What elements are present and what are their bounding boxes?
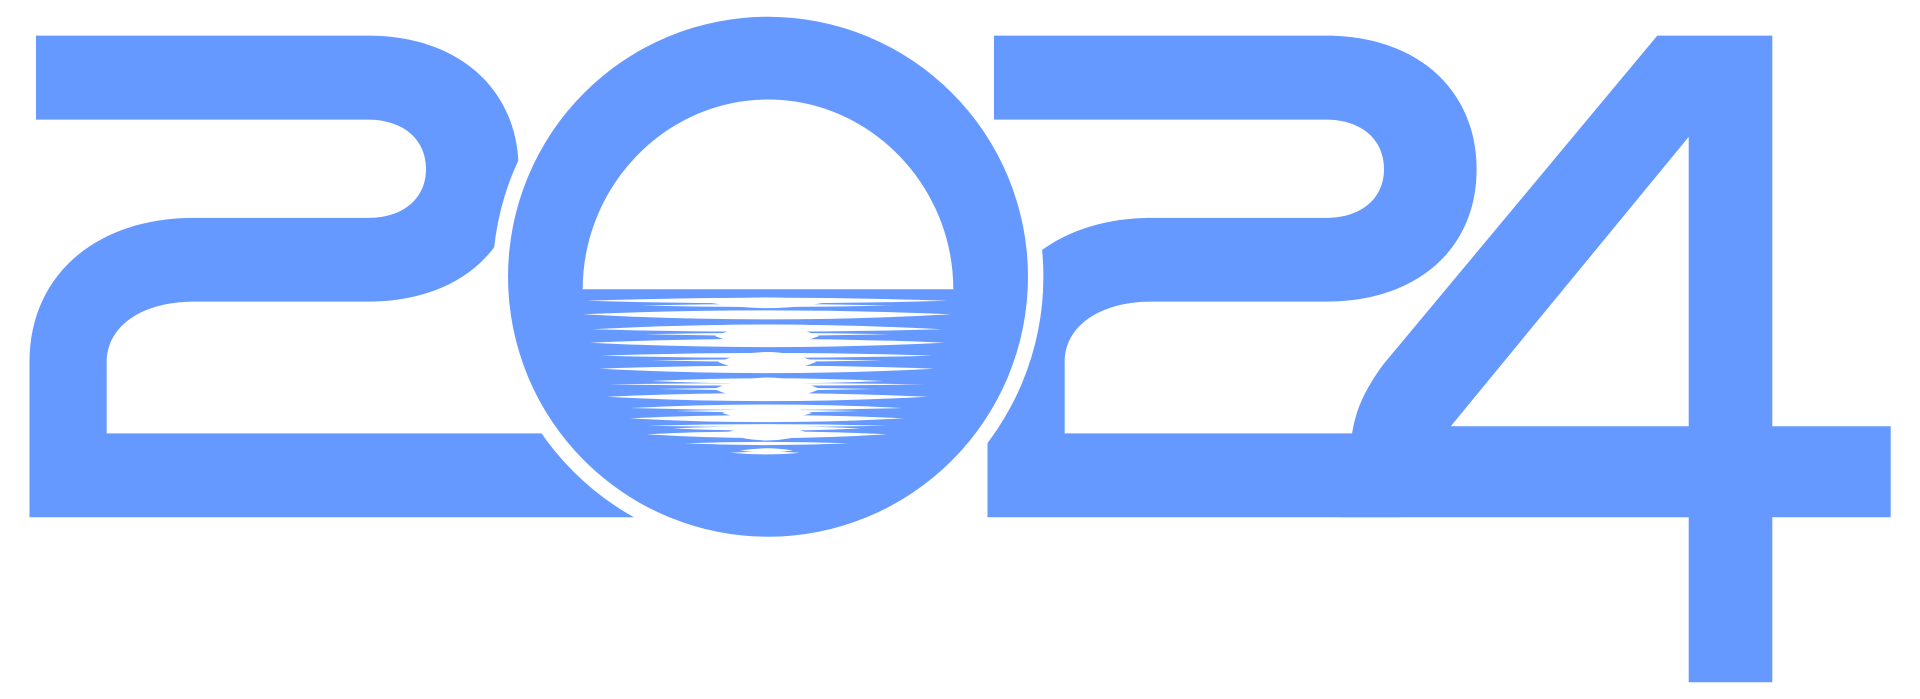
- sun circle: [508, 17, 1028, 537]
- digit: first 2: [30, 36, 780, 517]
- digit: second 2 and 4: [988, 36, 1891, 682]
- digit: second 2: [988, 36, 1477, 517]
- water reflection stripes: [583, 297, 951, 454]
- white halo around circle: [493, 1, 1043, 552]
- moon semicircle: [583, 100, 953, 289]
- digit: 4: [1340, 36, 1891, 682]
